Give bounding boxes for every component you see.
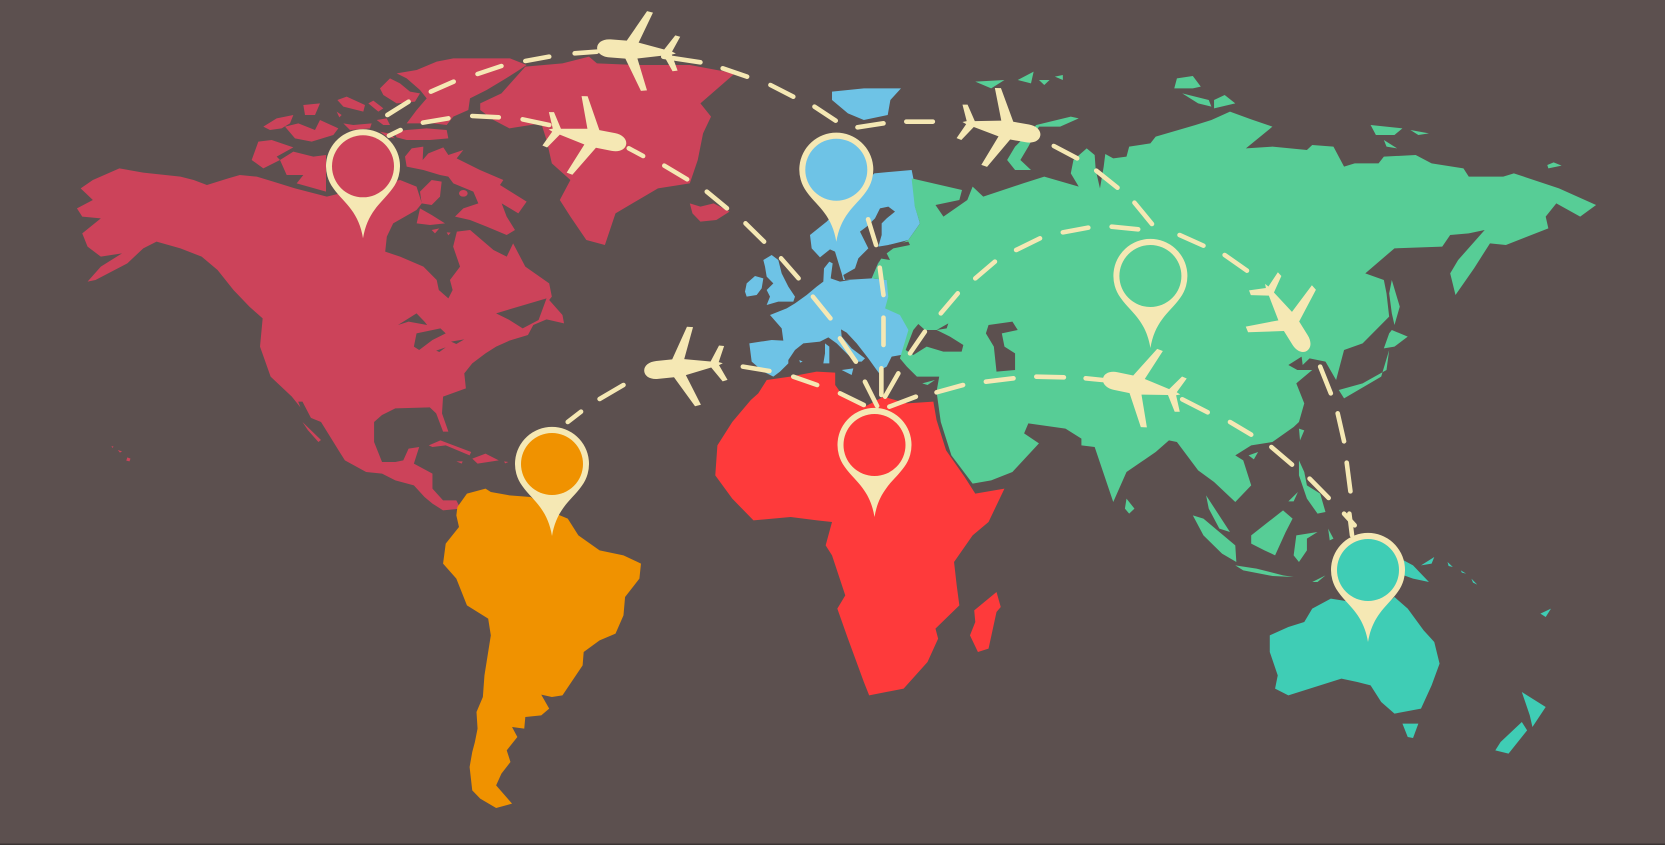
- route: Europe to Africa: [868, 219, 883, 395]
- continent: Asia: [872, 72, 1596, 582]
- Arctic islands of Russia: [922, 72, 1562, 398]
- airplane: Barents Sea: [953, 82, 1047, 175]
- Madagascar: [970, 592, 1001, 652]
- airplane: top over Greenland: [594, 8, 682, 94]
- map pin: Africa: [838, 408, 912, 517]
- map pin: Europe: [799, 133, 873, 242]
- continent: Africa: [715, 372, 1004, 695]
- airplane: central Asia: [1095, 339, 1191, 434]
- map pin: South America: [515, 427, 589, 536]
- Canadian Arctic islands: [252, 58, 527, 235]
- route: North America to Asia: [387, 52, 1152, 224]
- continent: North America and Greenland: [77, 57, 735, 510]
- inland seas of Asia: [986, 322, 1021, 510]
- map pin: Australia: [1331, 533, 1405, 642]
- airplane: east Asia: [1230, 260, 1341, 372]
- airplane: Atlantic: [640, 323, 730, 411]
- route: Africa to Australia over Asia: [885, 227, 1352, 535]
- continent: Europe: [745, 88, 920, 377]
- Baltic Sea and Black Sea: [843, 207, 963, 355]
- Greenland: [480, 57, 735, 245]
- lakes and bays of North America: [298, 298, 547, 433]
- dashed flight routes: [387, 52, 1355, 535]
- map pin: North America: [326, 129, 400, 238]
- route: South America to Africa: [568, 367, 864, 422]
- Svalbard: [832, 88, 901, 120]
- map pin: Asia: [1113, 239, 1187, 348]
- route: Africa to Australia over India: [889, 377, 1355, 525]
- Japan and Sakhalin: [1339, 280, 1408, 398]
- Southeast Asia: [1125, 429, 1333, 582]
- continent: Australia and Oceania: [1270, 555, 1551, 754]
- Caribbean and Hawaii: [111, 440, 508, 464]
- Scandinavia and Finland: [810, 170, 920, 280]
- Mediterranean islands: [799, 343, 853, 375]
- route: North America to Africa: [389, 116, 877, 406]
- continent: South America: [443, 489, 641, 808]
- airplane: over Greenland: [538, 90, 634, 184]
- British Isles: [763, 255, 795, 305]
